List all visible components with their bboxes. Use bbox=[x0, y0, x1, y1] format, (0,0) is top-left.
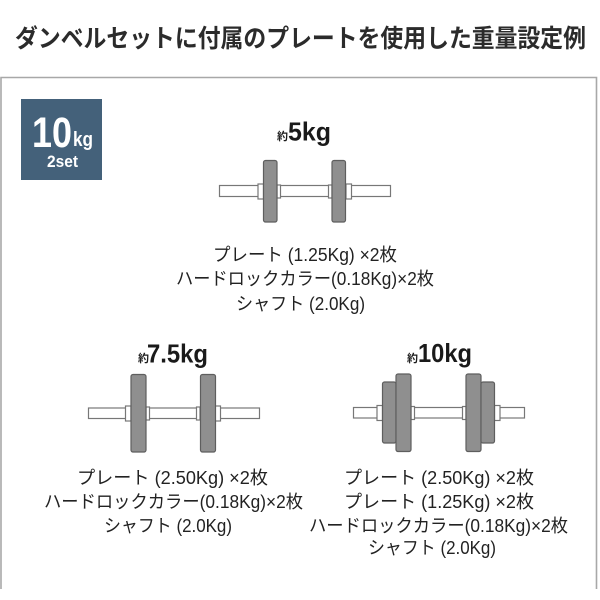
text block: 7.5kg parts: ハードロックカラー(0.18Kg)×2枚 bbox=[44, 492, 303, 512]
heading: about 10kg: 約 bbox=[407, 350, 418, 366]
badge: 10kg 2set: 2set bbox=[47, 152, 78, 171]
text block: 10kg parts: ハードロックカラー(0.18Kg)×2枚 bbox=[309, 516, 568, 536]
icon: 7.5kg barbell bbox=[88, 374, 260, 452]
heading: about 5kg: 5kg bbox=[288, 116, 331, 146]
badge: 10kg 2set: kg bbox=[73, 129, 93, 151]
heading: about 5kg: 約 bbox=[277, 128, 288, 144]
badge: 10kg 2set bbox=[21, 99, 102, 180]
text block: 10kg parts bbox=[309, 468, 568, 558]
text block: 5kg parts bbox=[176, 245, 434, 314]
text block: 5kg parts: ハードロックカラー(0.18Kg)×2枚 bbox=[176, 269, 434, 289]
text block: 10kg parts: プレート (1.25Kg) ×2枚 bbox=[344, 492, 534, 512]
badge: 10kg 2set: 10 bbox=[32, 109, 72, 157]
text block: 5kg parts: シャフト (2.0Kg) bbox=[236, 294, 365, 314]
text block: 5kg parts: プレート (1.25Kg) ×2枚 bbox=[213, 245, 397, 265]
heading: about 10kg: 10kg bbox=[418, 338, 472, 368]
text block: 10kg parts: シャフト (2.0Kg) bbox=[368, 538, 496, 558]
text block: 7.5kg parts: プレート (2.50Kg) ×2枚 bbox=[77, 468, 268, 488]
heading: about 7.5kg: 7.5kg bbox=[147, 338, 208, 368]
icon: 10kg barbell bbox=[354, 374, 524, 452]
text block: 10kg parts: プレート (2.50Kg) ×2枚 bbox=[344, 468, 534, 488]
icon: 5kg barbell bbox=[220, 160, 390, 222]
text block: 7.5kg parts bbox=[44, 468, 303, 536]
text block: 7.5kg parts: シャフト (2.0Kg) bbox=[104, 516, 232, 536]
heading: about 7.5kg: 約 bbox=[138, 350, 149, 366]
